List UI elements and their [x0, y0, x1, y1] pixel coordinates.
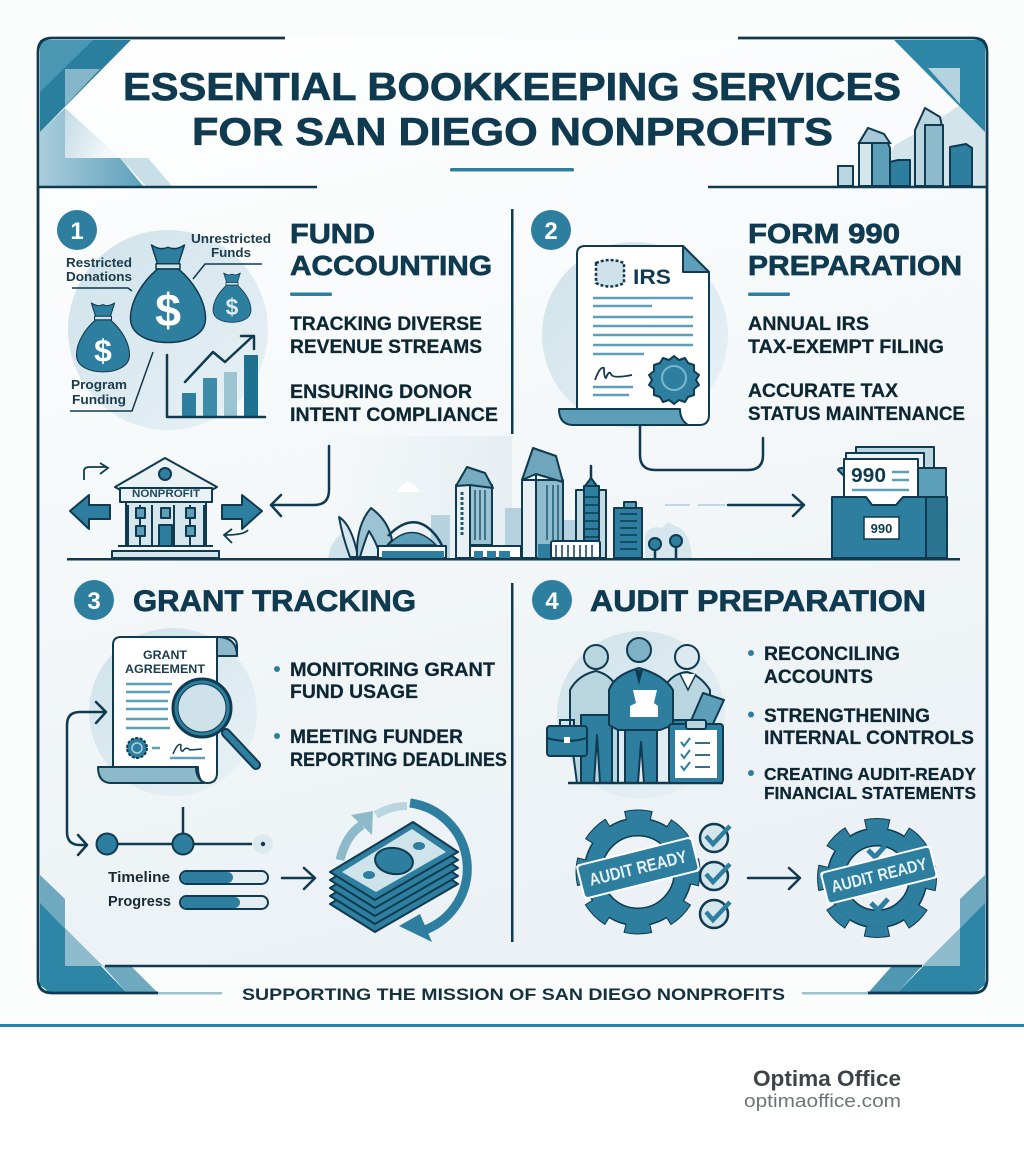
panel: form 990	[531, 210, 965, 470]
frame outline	[38, 38, 987, 993]
brand credit: Optima Office	[753, 1066, 901, 1091]
text block: ANNUAL IRS	[748, 313, 869, 335]
text block	[748, 643, 976, 803]
progress labels and bars: Progress	[108, 894, 171, 910]
text block: MEETING FUNDER	[290, 726, 463, 748]
number badge 2	[531, 210, 571, 250]
vertical divider top	[511, 209, 514, 434]
panel: grant tracking	[67, 580, 507, 942]
title: FOR SAN DIEGO NONPROFITS	[192, 111, 833, 154]
icon: small return arrow top	[84, 463, 108, 480]
bar chart	[167, 336, 265, 417]
heading underline	[748, 292, 790, 296]
ground line	[67, 558, 960, 560]
number badge 3	[74, 580, 114, 620]
icon: left money bag: $	[94, 332, 112, 368]
icon: small money bag: $	[226, 294, 239, 320]
icon: tower three	[551, 466, 606, 558]
icon: 990 file cabinet: 990	[871, 521, 892, 536]
icon: teal building	[614, 502, 642, 558]
labels: Funding	[72, 393, 126, 407]
title	[123, 66, 901, 154]
icon: 990 file cabinet: 990	[851, 465, 886, 487]
icon: grant agreement document	[98, 637, 237, 783]
number badge 1	[57, 210, 97, 250]
icon: audit ready gear right: AUDIT READY	[829, 854, 930, 897]
icon: grant agreement document: AGREEMENT	[125, 662, 206, 676]
icon: waterfront shells and dome	[339, 508, 446, 558]
title underline	[450, 168, 574, 172]
icon: audit ready gear right	[820, 824, 938, 932]
text block	[748, 313, 965, 425]
skyline backdrop tint	[330, 436, 512, 558]
icon: large money bag: $	[155, 284, 181, 336]
heading: FUND	[290, 218, 375, 249]
icon: magnifying glass	[175, 681, 256, 765]
brand credit: optimaoffice.com	[744, 1090, 901, 1111]
icon: large money bag	[130, 245, 206, 342]
heading underline	[290, 292, 332, 296]
icon: check circles	[700, 824, 730, 928]
corner: top left	[40, 40, 172, 186]
icon: clipboard with checklist	[669, 693, 724, 783]
illustration circle	[89, 628, 257, 796]
text block: TAX-EXEMPT FILING	[748, 336, 944, 358]
illustration circle	[557, 631, 725, 799]
text block	[290, 313, 498, 426]
title: ESSENTIAL BOOKKEEPING SERVICES	[123, 66, 901, 109]
number badge 4	[532, 580, 572, 620]
text block: ACCOUNTS	[764, 666, 873, 688]
corner: bottom left	[40, 875, 158, 993]
number badge 1: 1	[70, 218, 84, 245]
icon: tower two	[522, 448, 563, 558]
icon: audit ready gear left: AUDIT READY	[587, 846, 689, 890]
footer tagline: SUPPORTING THE MISSION OF SAN DIEGO NONPROFITS	[242, 986, 785, 1004]
icon: right arrow	[222, 495, 262, 529]
icon: IRS document: IRS	[633, 266, 671, 289]
city skyline band	[328, 448, 692, 558]
heading: GRANT TRACKING	[133, 585, 416, 618]
panel: fund accounting	[57, 210, 498, 430]
labels: Funds	[211, 246, 251, 260]
text block: ACCURATE TAX	[748, 380, 898, 402]
heading	[748, 218, 962, 281]
icon: nonprofit building: NONPROFIT	[132, 488, 200, 500]
text block: STATUS MAINTENANCE	[748, 403, 965, 425]
arrow to money	[282, 868, 315, 889]
icon: auditors team	[568, 638, 723, 783]
text block: INTERNAL CONTROLS	[764, 727, 974, 749]
text block: RECONCILING	[764, 643, 900, 665]
bottom rule	[0, 1024, 1024, 1027]
background buildings	[328, 482, 692, 558]
icon: audit ready gear left	[575, 816, 701, 928]
panel: audit preparation	[532, 580, 976, 932]
text block: INTENT COMPLIANCE	[290, 404, 498, 426]
section dividers	[38, 187, 987, 966]
arrow to cabinet	[665, 495, 804, 516]
heading: ACCOUNTING	[290, 250, 492, 281]
icon: small return arrow bottom	[224, 529, 248, 543]
connector with arrows	[67, 702, 106, 855]
icon: small money bag	[213, 273, 251, 322]
icon: nonprofit building	[112, 458, 219, 558]
text block	[274, 659, 507, 771]
arrow between gears	[748, 868, 800, 889]
icon: grant agreement document: GRANT	[143, 648, 188, 662]
number badge 4: 4	[545, 588, 559, 615]
number badge 2: 2	[544, 218, 558, 245]
text block: TRACKING DIVERSE	[290, 313, 482, 335]
text block: STRENGTHENING	[764, 705, 930, 727]
progress labels and bars: Timeline	[108, 870, 170, 886]
labels: Unrestricted	[191, 232, 271, 246]
labels: Program	[71, 378, 127, 392]
corner: top right	[870, 40, 985, 186]
text block: FINANCIAL STATEMENTS	[764, 783, 976, 803]
heading: FORM 990	[748, 218, 900, 249]
text block: REPORTING DEADLINES	[290, 749, 507, 771]
heading: PREPARATION	[748, 250, 962, 281]
text block: REVENUE STREAMS	[290, 336, 482, 358]
icon: IRS document	[559, 246, 709, 425]
labels: Restricted	[66, 256, 132, 270]
vertical divider bottom	[511, 583, 514, 942]
icon: briefcase	[547, 720, 587, 756]
icon: 990 file cabinet	[832, 447, 947, 558]
text block: MONITORING GRANT	[290, 659, 495, 681]
icon: trees	[649, 535, 682, 558]
header skyline	[838, 108, 972, 186]
icon: tower one	[456, 467, 521, 558]
heading	[290, 218, 492, 281]
icon: left money bag	[76, 303, 130, 372]
text block: CREATING AUDIT-READY	[764, 764, 976, 784]
illustration circle	[542, 242, 728, 428]
panel background	[38, 38, 987, 966]
text block: FUND USAGE	[290, 681, 418, 703]
white footer band	[0, 1027, 1024, 1154]
number badge 3: 3	[87, 588, 101, 615]
heading: AUDIT PREPARATION	[590, 585, 926, 618]
icon: money stack with cycle arrows	[330, 803, 467, 942]
illustration circle	[68, 230, 268, 430]
labels: Donations	[66, 270, 132, 284]
labels	[66, 232, 271, 411]
timeline	[96, 807, 273, 854]
progress labels and bars	[108, 870, 268, 910]
corner: bottom right	[868, 875, 985, 993]
brand credit	[744, 1066, 901, 1111]
text block: ENSURING DONOR	[290, 381, 472, 403]
connector arrow to nonprofit	[271, 446, 329, 516]
connector arrow	[640, 426, 763, 470]
icon: left arrow	[70, 495, 110, 529]
